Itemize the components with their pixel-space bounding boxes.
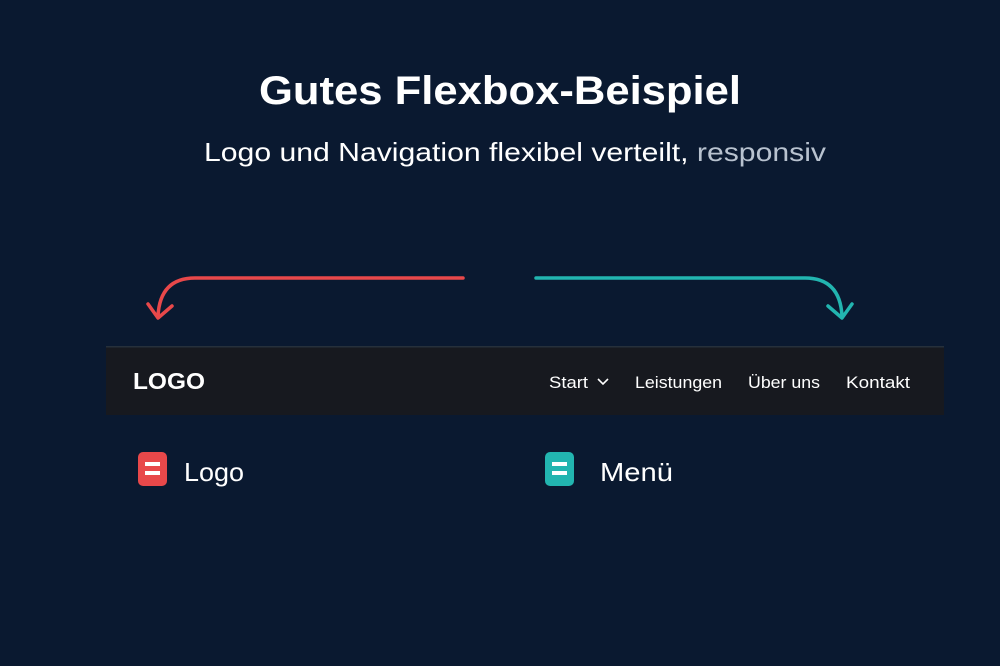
legend: logo: Logo: [184, 457, 244, 487]
title: Gutes Flexbox-Beispiel: [259, 69, 741, 113]
legend: menu: [545, 452, 673, 487]
icon: red: [138, 452, 167, 486]
navbar logo: LOGO: [133, 368, 205, 394]
legend: logo: [138, 452, 244, 487]
nav links: Über uns: [748, 373, 820, 392]
subtitle: Logo und Navigation flexibel verteilt, responsiv: [204, 137, 826, 167]
nav links: Start: [549, 373, 588, 392]
arrow: left red: [148, 278, 463, 318]
legend: menu: Menü: [600, 457, 673, 487]
nav links: Leistungen: [635, 373, 722, 392]
nav links: [549, 373, 910, 392]
icon: teal: [545, 452, 574, 486]
nav links: Kontakt: [846, 373, 910, 392]
navbar: [106, 346, 944, 415]
arrow: right teal: [536, 278, 852, 318]
